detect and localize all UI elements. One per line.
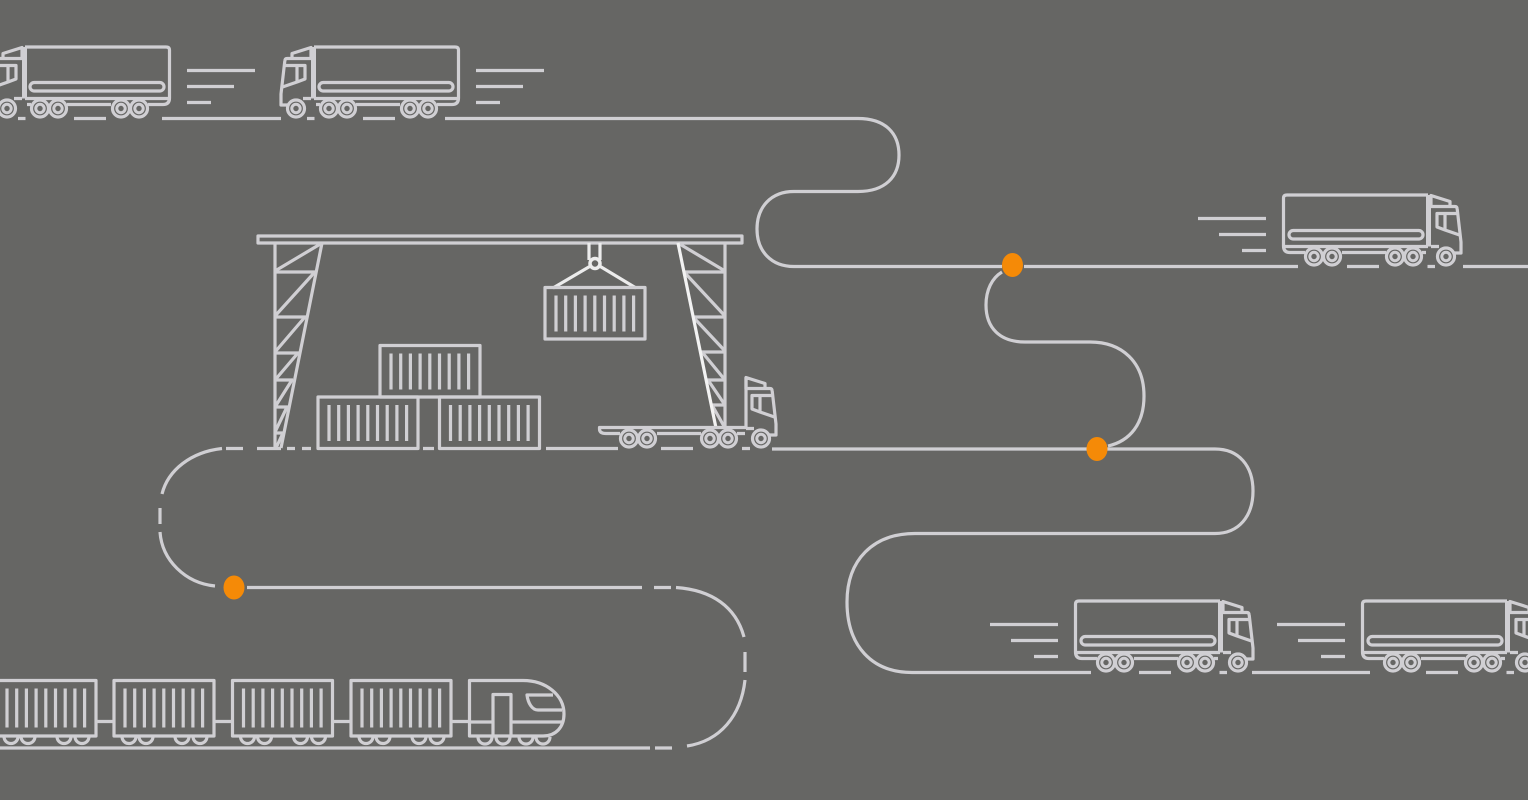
- truck: upper right: [1198, 195, 1461, 266]
- flatbed cab: [746, 378, 776, 435]
- container: bottom left: [318, 397, 418, 448]
- wagon 4: [351, 680, 451, 744]
- flatbed truck under crane: [600, 378, 776, 447]
- route: top road winding to upper right: [162, 118, 1528, 266]
- route: branch from first waypoint to second waypoint: [986, 272, 1144, 446]
- hanging container: [545, 288, 645, 339]
- flatbed wheels: [620, 430, 770, 447]
- crane: gantry: [258, 236, 742, 448]
- flatbed deck: [600, 428, 746, 434]
- waypoint dot 2: [1086, 437, 1108, 461]
- crane: top beam: [258, 236, 742, 243]
- crane: hook and cables: [553, 243, 636, 288]
- waypoint dot 1: [1002, 253, 1023, 277]
- train: [0, 680, 564, 744]
- crane: right leg: [678, 243, 725, 428]
- crane: left leg: [275, 243, 322, 448]
- route: road and dashes under crane: [257, 447, 750, 450]
- locomotive: [470, 680, 564, 744]
- truck: lower right, first: [990, 601, 1253, 672]
- container: top: [380, 346, 480, 397]
- route: dashed left curve: [160, 448, 243, 586]
- truck: top centre: [281, 47, 544, 118]
- wagon 3: [232, 680, 332, 744]
- truck: lower right, second: [1277, 601, 1528, 672]
- container stack: [318, 346, 540, 448]
- wagon 1: [0, 680, 96, 744]
- flatbed rear of cab: [744, 378, 748, 427]
- waypoint dot 3: [224, 576, 244, 600]
- route: middle road to lower right: [772, 449, 1370, 672]
- truck: top left: [0, 47, 255, 118]
- train: coupling links: [96, 720, 469, 723]
- container: bottom right: [440, 397, 540, 448]
- route: lower road to train: [0, 588, 745, 748]
- wagon 2: [114, 680, 214, 744]
